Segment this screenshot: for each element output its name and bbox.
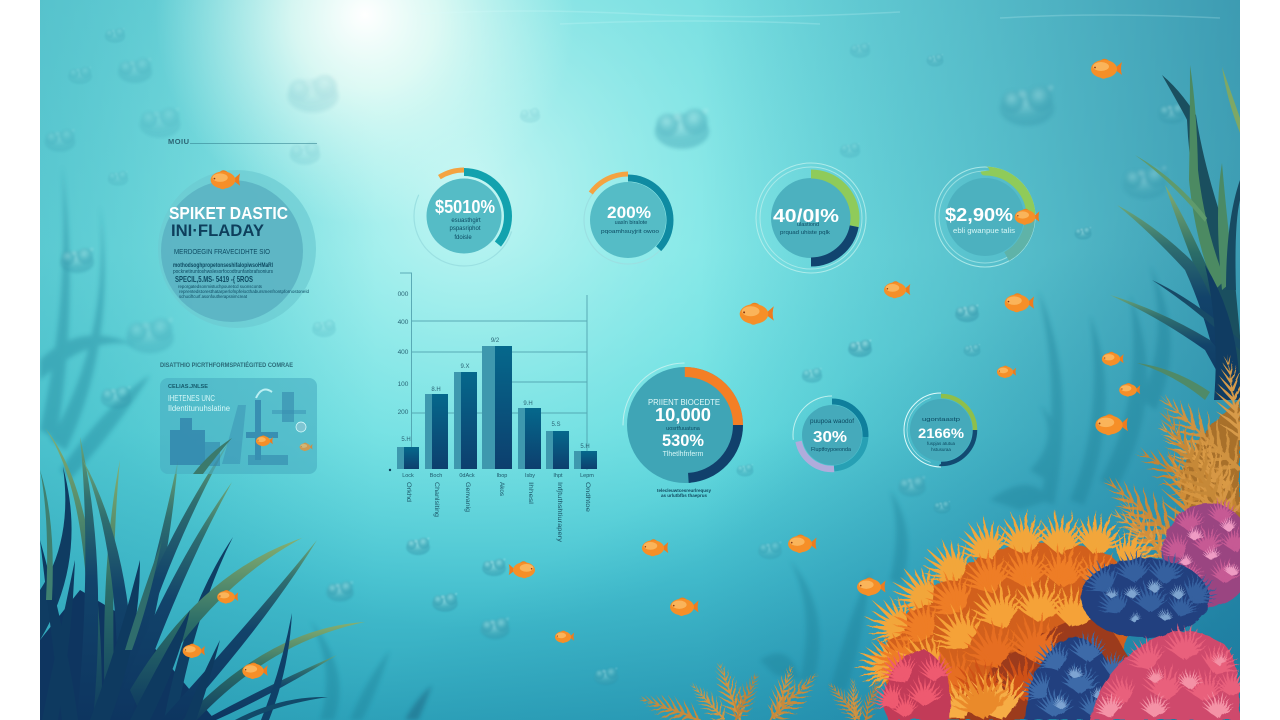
bar value labels: 9.H xyxy=(523,401,533,407)
category labels: 0dAck xyxy=(459,473,475,479)
stat description: pqoamhsuyjrit owoo xyxy=(601,229,659,235)
category labels xyxy=(402,473,594,479)
rotated axis text: Ihhesl xyxy=(527,482,533,504)
category labels: Lock xyxy=(402,473,414,479)
bar value labels: 5.S xyxy=(551,422,561,428)
stat sublabel: uosrtfuuatuna xyxy=(666,426,701,432)
stat label: PRIIENT BIOCEDTE xyxy=(648,397,720,407)
stat description: esuasthgirt xyxy=(451,218,481,224)
rotated axis text xyxy=(405,482,590,542)
text block: subtitle and body: reporgatedsonmistuchpouretcd suonsconts xyxy=(178,284,263,289)
rotated axis text: Genvanig xyxy=(464,482,470,512)
y axis labels xyxy=(398,291,409,416)
rotated axis text: Chanlsiting xyxy=(433,482,439,517)
coral: pink clump left xyxy=(871,649,1012,720)
category labels: Ibop xyxy=(497,473,507,479)
coral: blue lower cluster xyxy=(1022,631,1126,720)
bars xyxy=(397,346,597,469)
y axis labels: 100 xyxy=(398,381,409,388)
panel: main title circle xyxy=(158,170,316,328)
stat value: 40/0I% xyxy=(773,206,839,226)
panel: illustrated industry card: CELIAS.JNLSE xyxy=(168,384,208,390)
distant seaweed silhouettes xyxy=(40,165,1171,720)
stat description: fuspjas atutua xyxy=(927,441,956,446)
donut 5: 10,000 / 530% xyxy=(623,363,747,498)
rotated axis text: Ondhtoe xyxy=(584,482,590,513)
panel: main title circle: INI·FLADAY xyxy=(171,221,265,240)
bar value labels: 5.H xyxy=(401,437,411,443)
stat label: puupoa waodof xyxy=(810,419,854,425)
coral: ochre ferns xyxy=(1103,354,1240,560)
category labels: Lepm xyxy=(580,473,594,479)
text block: subtitle and body: SPECIL,5.MS- 5419 -{ 5ROS xyxy=(175,274,253,284)
category labels: Boch xyxy=(430,473,442,479)
seaweed blade crossing card xyxy=(193,438,232,474)
seaweed: top right xyxy=(1110,65,1246,400)
text block: subtitle and body: mothodsoghpropetonseshifalopiwsoHMaRl xyxy=(173,263,273,269)
stat value: 2166% xyxy=(918,425,965,441)
stat description: pspasriphot xyxy=(449,226,481,232)
donut 1: $5010% xyxy=(414,166,514,266)
text block: subtitle and body: reprentedstoresthatarperlofnpfelocthabursmenfrontpfornostoneld xyxy=(179,289,309,294)
stat description xyxy=(927,441,956,452)
stat sublabel lower: Tlhetlhfnferm xyxy=(663,451,704,458)
panel: header label: MOIU xyxy=(168,137,189,146)
chart origin dot xyxy=(389,469,391,471)
stat description xyxy=(780,222,830,236)
y axis labels: 400 xyxy=(398,349,409,356)
stat footnote xyxy=(657,488,712,498)
bar value labels: 8.H xyxy=(431,387,441,393)
stat value: 30% xyxy=(813,429,847,446)
donut 4: $2,90% xyxy=(935,167,1039,267)
stat value: 200% xyxy=(607,204,651,222)
stat description: ebli gwanpue talis xyxy=(953,228,1016,235)
donut 3: 40/01% xyxy=(756,163,866,273)
stat footnote: telecleuwtcesreurlrequsy xyxy=(657,488,712,493)
coral: coral-pink foreground cluster xyxy=(1089,623,1250,720)
stat description: Fluptfoypoeonda xyxy=(811,447,851,453)
text block: subtitle and body: pocknetiruntoshwslesorfocodtrunfanbrafsoniurs xyxy=(173,269,273,275)
school of orange fish xyxy=(183,59,1140,679)
seaweed: bottom left xyxy=(40,428,365,720)
icon: goldfish on circle xyxy=(211,170,240,189)
text block: subtitle and body: schuciftcurf.asonfoutherapsnimcreat xyxy=(179,294,248,299)
coral: small bottom fern xyxy=(633,655,888,720)
rotated axis text: Akos xyxy=(498,482,504,496)
stat description: ulastiond xyxy=(797,222,819,228)
stat footnote: as urlutbfbs thaeprus xyxy=(661,493,707,498)
category labels: Ihpt xyxy=(553,473,563,479)
y axis labels: 000 xyxy=(398,291,409,298)
text block: subtitle and body xyxy=(173,249,309,299)
heading: title: SPIKET DASTIC xyxy=(169,203,288,223)
stat description xyxy=(449,218,481,241)
y axis labels: 200 xyxy=(398,409,409,416)
bar value labels: 5.H xyxy=(580,444,590,450)
stat label: ugontaastp xyxy=(922,417,960,423)
stat value: $5010% xyxy=(435,197,495,217)
donut 7: 216% xyxy=(904,393,978,467)
coral: magenta cluster xyxy=(1160,498,1240,608)
bar value labels: 9/2 xyxy=(491,338,500,344)
text block: subtitle and body: MERDOEGIN FRAVECIDHTE SIO xyxy=(174,249,270,256)
stat description: fdoisle xyxy=(454,235,472,241)
stat description: uasln biralote xyxy=(615,220,647,226)
stat description xyxy=(601,220,659,235)
bar value labels: 9.X xyxy=(460,364,470,370)
stat description: prquad uhiste pqlk xyxy=(780,230,830,236)
bar value labels xyxy=(401,338,590,450)
donut 2: 200% xyxy=(582,174,674,266)
panel: illustrated industry card xyxy=(160,360,317,474)
y axis labels: 400 xyxy=(398,319,409,326)
illustration: factory scene xyxy=(170,390,306,466)
icon: goldfish xyxy=(1015,209,1039,225)
heading: card caption: DISATTHIO PICRTHFORMSPATIÉGITED COMRAE xyxy=(160,360,294,369)
chart axes and gridlines xyxy=(400,273,587,470)
category labels: Isby xyxy=(525,473,535,479)
bar chart xyxy=(389,273,597,542)
panel: illustrated industry card: IHETENES UNC xyxy=(168,393,215,403)
rotated axis text: Orkhd xyxy=(405,482,411,502)
stat value: $2,90% xyxy=(945,204,1013,225)
coral: blue upper cluster xyxy=(1080,550,1218,638)
rotated axis text: Infjtuthshtiurapery xyxy=(556,482,562,542)
stat value 10,000: 10,000 xyxy=(655,405,711,425)
donut 6: 30% xyxy=(793,396,871,474)
coral: large orange clump xyxy=(849,504,1170,720)
panel: illustrated industry card: Ildentitunuhslatine xyxy=(168,404,231,413)
coral reef xyxy=(633,349,1260,720)
stat value 530%: 530% xyxy=(662,432,704,450)
stat description: hstusuraa xyxy=(931,447,951,452)
